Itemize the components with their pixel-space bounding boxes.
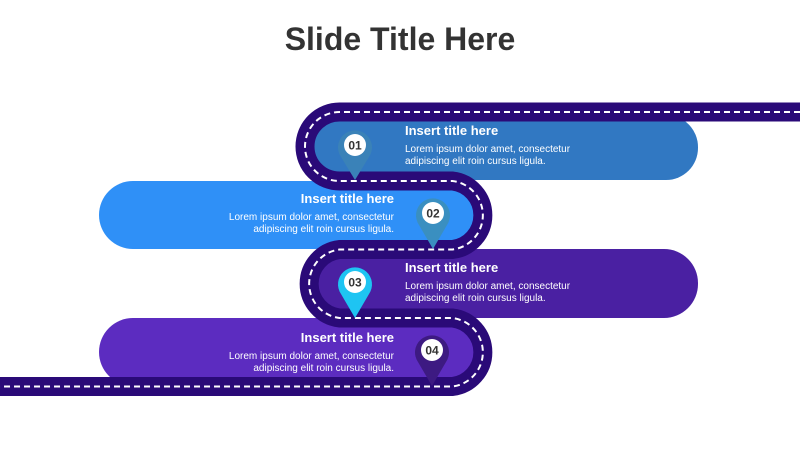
text 2: adipiscing elit roin cursus ligula. <box>253 224 394 235</box>
text 1 <box>405 123 571 167</box>
text 1: Insert title here <box>405 123 498 138</box>
text 1: Lorem ipsum dolor amet, consectetur <box>405 144 571 155</box>
text 3: Insert title here <box>405 260 498 275</box>
text 1: adipiscing elit roin cursus ligula. <box>405 156 546 167</box>
pin 02: 02 <box>426 206 440 220</box>
pin 01 <box>338 130 372 180</box>
pin 02 <box>416 198 450 249</box>
pin 04: 04 <box>425 344 439 358</box>
pin 01: 01 <box>348 138 362 152</box>
card 4 <box>99 318 478 386</box>
text 4: Lorem ipsum dolor amet, consectetur <box>229 351 395 362</box>
card 2 <box>99 181 478 249</box>
card 1 <box>314 115 698 180</box>
pin 03 <box>338 267 372 318</box>
pin 04 <box>415 335 449 386</box>
text 3 <box>405 260 571 304</box>
text 4 <box>229 330 395 374</box>
pin 03: 03 <box>348 276 362 290</box>
title: Slide Title Here <box>285 21 515 57</box>
card 3 <box>314 249 698 318</box>
text 4: Insert title here <box>301 330 394 345</box>
text 2 <box>229 191 395 235</box>
road <box>0 112 800 386</box>
text 2: Insert title here <box>301 191 394 206</box>
text 4: adipiscing elit roin cursus ligula. <box>253 363 394 374</box>
text 2: Lorem ipsum dolor amet, consectetur <box>229 212 395 223</box>
text 3: adipiscing elit roin cursus ligula. <box>405 293 546 304</box>
text 3: Lorem ipsum dolor amet, consectetur <box>405 281 571 292</box>
